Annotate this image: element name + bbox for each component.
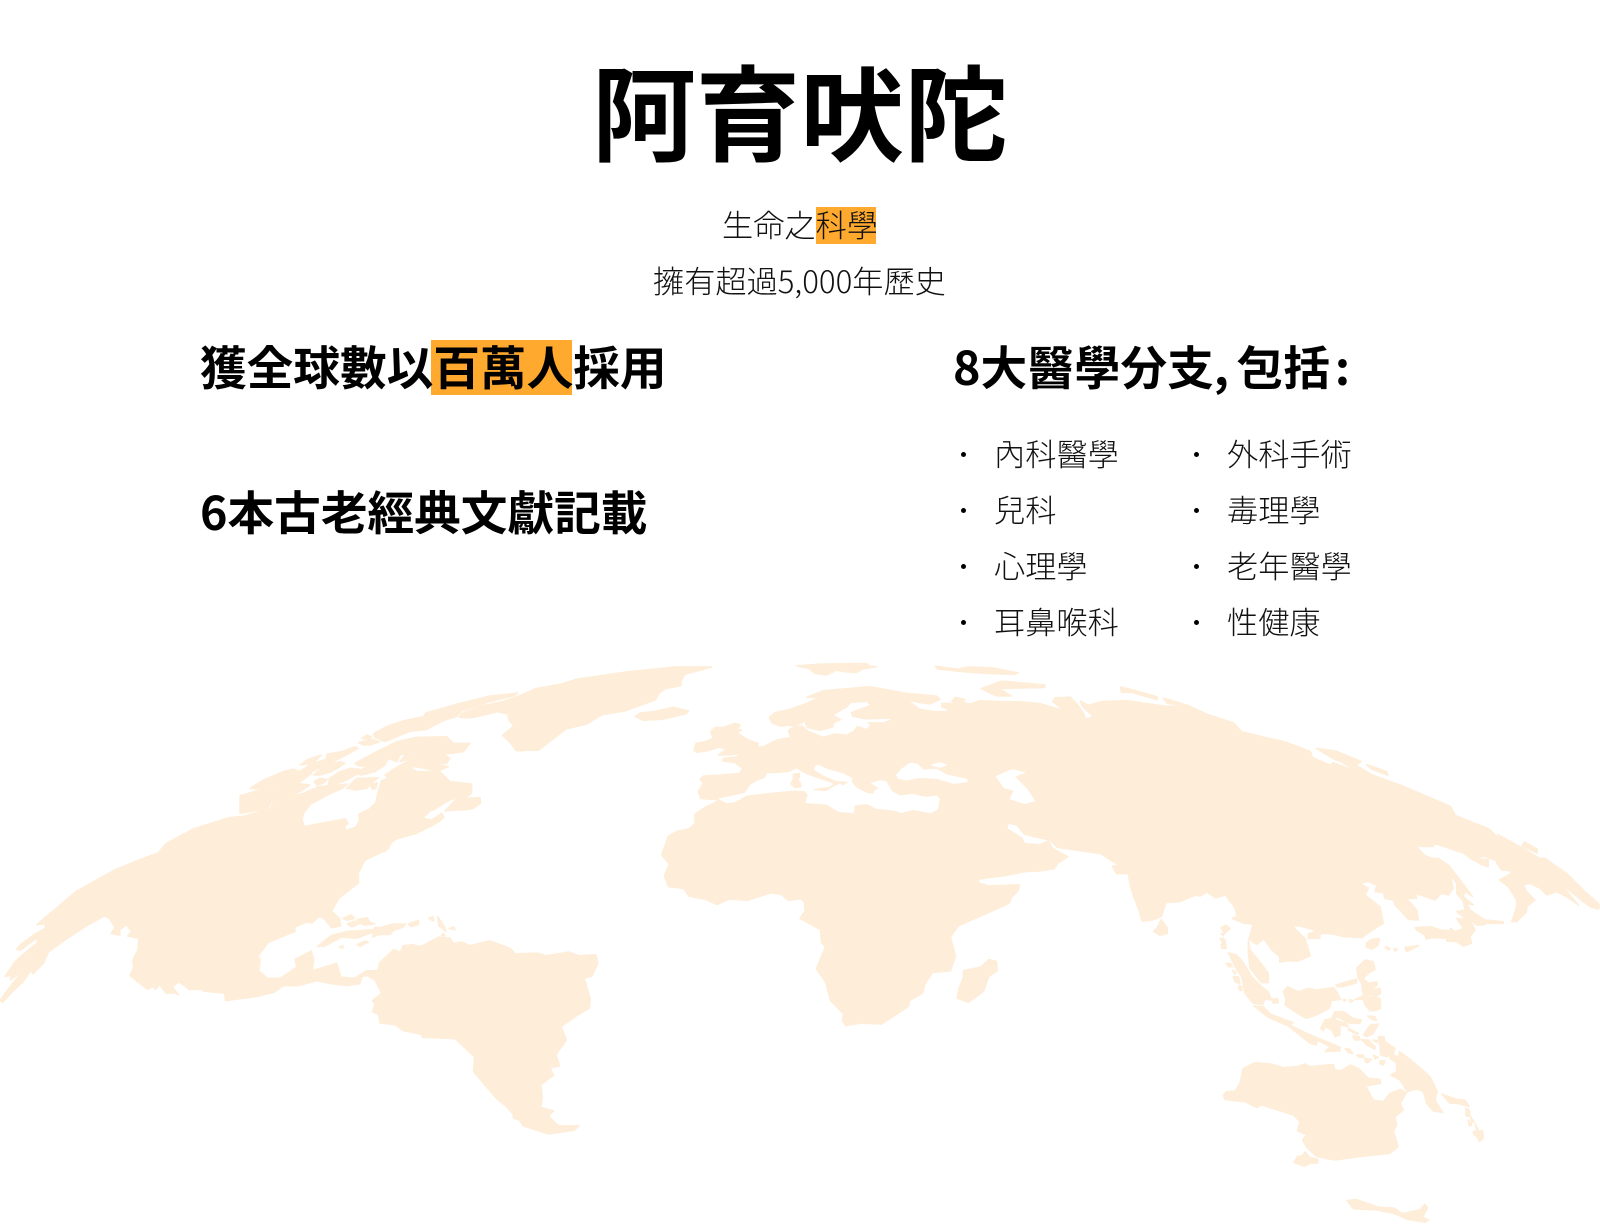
list: medical branches: 心理學: [994, 542, 1088, 587]
subtitle: 生命之科學: [722, 201, 878, 246]
heading: classic texts: 6本古老經典文獻記載: [200, 477, 647, 544]
heading: adoption: 獲全球數以百萬人採用: [200, 332, 667, 399]
subtitle highlight: [816, 207, 876, 244]
history line: 擁有超過5,000年歷史: [653, 257, 946, 302]
heading highlight: [431, 340, 572, 395]
list: medical branches: 外科手術: [1227, 430, 1352, 475]
list: medical branches: 兒科: [994, 486, 1056, 531]
heading: branches: 8大醫學分支, 包括:: [953, 332, 1350, 399]
list: medical branches: 內科醫學: [994, 430, 1119, 475]
list: medical branches: 毒理學: [1227, 486, 1321, 531]
list: medical branches: 耳鼻喉科: [994, 598, 1119, 643]
list: medical branches: 性健康: [1227, 598, 1321, 643]
list: medical branches: [961, 430, 1352, 643]
title: 阿育吠陀: [592, 32, 1008, 183]
list: medical branches: 老年醫學: [1227, 542, 1352, 587]
